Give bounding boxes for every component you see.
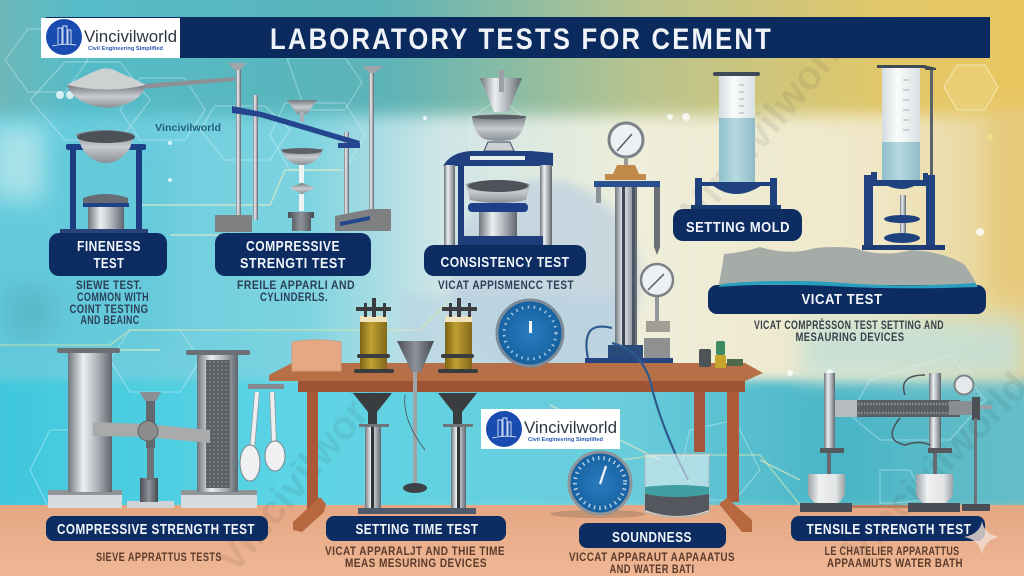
icon: table gauge	[497, 300, 563, 366]
icon: consistency apparatus	[443, 70, 553, 247]
text block: setting time caption: MEAS MESURING DEVICES	[345, 558, 487, 570]
icon: dark funnels and columns	[353, 393, 477, 514]
icon: soundness dial	[550, 452, 646, 518]
icon: sieve scoop	[67, 68, 235, 108]
title: LABORATORY TESTS FOR CEMENT	[270, 23, 773, 56]
icon: hose	[586, 327, 688, 480]
panel: compressive strength upper	[215, 233, 371, 304]
panel: soundness	[569, 523, 735, 576]
heading: setting mold	[673, 209, 802, 241]
text block: vicat caption: MESAURING DEVICES	[796, 332, 904, 344]
heading: compressive strength test	[46, 516, 268, 541]
text block: fineness caption: AND BEAINC	[80, 315, 140, 327]
heading: tensile strength test	[791, 516, 985, 541]
logo: top: Civil Engineering Simplified	[88, 46, 163, 52]
icon: pressure gauge column	[585, 123, 673, 366]
heading: soundness: SOUNDNESS	[612, 529, 692, 546]
text block: setting time caption: VICAT APPARALJT AND THIE TIME	[325, 546, 505, 558]
panel: compressive strength lower	[46, 516, 268, 564]
heading: compressive strength test: COMPRESSIVE STRENGTH TEST	[57, 521, 255, 538]
text block: fineness caption: SIEWE TEST.	[76, 280, 142, 292]
text block: tensile caption: LE CHATELIER APPARATTUS	[824, 546, 960, 558]
heading: compressive strength: COMPRESSIVE	[246, 238, 340, 255]
icon: spoons	[240, 384, 285, 481]
text block: setting time caption	[325, 546, 505, 570]
icon: tensile apparatus	[800, 373, 992, 512]
heading: setting mold: SETTING MOLD	[686, 219, 790, 236]
text block: fineness caption: COINT TESTING	[70, 304, 148, 316]
heading: fineness test: FINENESS	[77, 238, 141, 255]
panel: fineness test	[49, 233, 167, 327]
icon: compressive strength frame	[215, 63, 391, 232]
icon: fineness test sieve stand	[60, 130, 148, 234]
icon: funnel and needle	[397, 341, 434, 493]
floor	[0, 505, 1024, 576]
logo: top	[41, 18, 180, 58]
heading: setting time test: SETTING TIME TEST	[356, 521, 478, 538]
text block: soundness caption: AND WATER BATI	[610, 564, 694, 576]
text block: vicat caption: VICAT COMPRÉSSON TEST SETTING AND	[754, 319, 944, 332]
watermark text	[208, 14, 1024, 576]
icon: teal water strip	[718, 281, 978, 288]
panel: consistency test	[424, 245, 586, 292]
heading: compressive strength: STRENGTI TEST	[240, 255, 346, 272]
heading: soundness	[579, 523, 726, 548]
heading: vicat test: VICAT TEST	[802, 291, 882, 308]
heading: vicat test	[708, 285, 986, 314]
logo: center: Civil Engineering Simplified	[528, 437, 603, 443]
text block: fineness caption: COMMON WITH	[77, 292, 149, 304]
text block: compressive caption: CYLINDERLS.	[260, 292, 328, 304]
text block: sieve caption: SIEVE APPRATTUS TESTS	[96, 552, 222, 564]
heading: compressive strength	[215, 233, 371, 276]
text block: vicat caption	[754, 319, 944, 344]
watermark text: Vincivilworld	[208, 364, 400, 576]
icon: vicat cylinder stand	[862, 65, 945, 250]
text block: soundness caption: VICCAT APPARAUT AAPAAATUS	[569, 552, 735, 564]
watermark text: Vincivilworld	[673, 14, 865, 231]
icon: small bottles	[699, 341, 743, 368]
icon: water beaker	[644, 454, 711, 517]
icon: sparkle	[964, 521, 999, 555]
heading: fineness test: TEST	[94, 255, 124, 272]
heading: consistency test	[424, 245, 586, 276]
title bar	[46, 17, 990, 58]
text block: fineness caption	[70, 280, 149, 327]
text block: soundness caption	[569, 552, 735, 576]
logo: center: Vincivilworld	[524, 418, 617, 437]
icon: gray cement mound	[718, 247, 978, 288]
heading: fineness test	[49, 233, 167, 276]
icon: setting mold cylinder	[691, 72, 781, 209]
text block: compressive caption: FREILE APPARLI AND	[237, 280, 355, 292]
panel: vicat test	[708, 281, 986, 344]
heading: consistency test: CONSISTENCY TEST	[440, 254, 570, 271]
text block: compressive caption	[237, 280, 355, 304]
icon: lab table	[269, 363, 763, 532]
icon: steel cylinder pair and jack	[48, 348, 257, 508]
watermark label: Vincivilworld	[155, 122, 221, 134]
panel: tensile strength test	[791, 516, 985, 570]
text block: consistency caption: VICAT APPISMENCC TEST	[438, 280, 574, 292]
text block: tensile caption	[824, 546, 963, 570]
logo: top: Vincivilworld	[84, 27, 177, 46]
text block: tensile caption: APPAAMUTS WATER BATH	[827, 558, 963, 570]
heading: setting time test	[326, 516, 506, 541]
panel: setting time test	[325, 516, 506, 570]
icon: yellow cylinders	[354, 298, 478, 373]
icon: mixing box	[292, 340, 341, 371]
logo: center	[481, 409, 620, 449]
heading: tensile strength test: TENSILE STRENGTH TEST	[806, 521, 972, 538]
